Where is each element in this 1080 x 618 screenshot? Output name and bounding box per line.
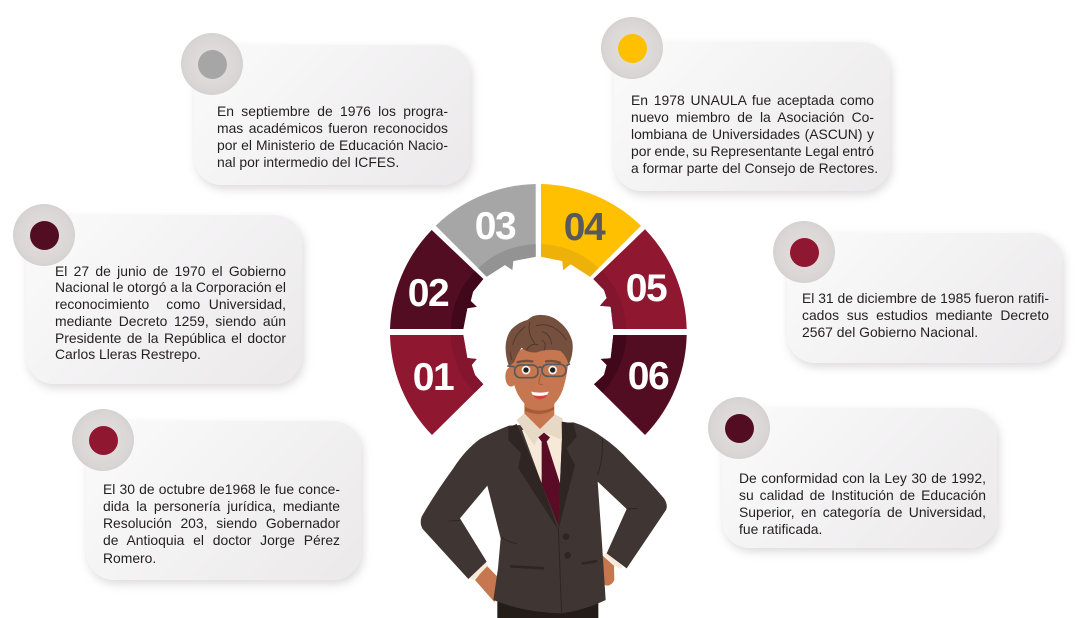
text: event 06 description: fue ratificada. bbox=[739, 521, 822, 537]
text: event 02 description bbox=[55, 262, 286, 362]
segment 01 bbox=[390, 335, 484, 435]
text: event 04 description: a formar parte del Consejo de Rectores. bbox=[631, 160, 878, 176]
number 02: 02 bbox=[408, 272, 449, 315]
shirt cuffs bbox=[469, 552, 623, 580]
text: event 06 description: De conformidad con la Ley 30 de 1992, bbox=[739, 470, 986, 486]
text: event 02 description: reconocimiento como Universidad, bbox=[55, 296, 286, 312]
text: event 03 description: mas académicos fueron reconocidos bbox=[217, 120, 448, 136]
text: event 03 description: nal por intermedio del ICFES. bbox=[217, 154, 399, 170]
text: event 04 description: por ende, su Representante Legal entró bbox=[631, 143, 874, 159]
text: event 01 description: de Antioquia el doctor Jorge Pérez bbox=[103, 532, 340, 548]
text: event 01 description bbox=[103, 480, 340, 566]
panel: event 05, 1985 bbox=[787, 233, 1062, 363]
segment 03 bbox=[436, 184, 536, 277]
text: event 05 description: cados sus estudios mediante Decreto bbox=[802, 307, 1049, 323]
nose bbox=[539, 373, 543, 385]
segment 05 bbox=[593, 229, 687, 329]
face bbox=[510, 338, 569, 409]
panel: event 06, 1992 bbox=[722, 408, 997, 548]
panel: event 01, 1968 bbox=[86, 421, 361, 580]
number 05: 05 bbox=[626, 267, 667, 310]
number 04: 04 bbox=[564, 206, 606, 249]
text: event 03 description: En septiembre de 1976 los progra- bbox=[217, 102, 448, 118]
number 01: 01 bbox=[413, 356, 454, 399]
text: event 03 description bbox=[217, 102, 448, 170]
segment 02 bbox=[390, 230, 484, 329]
text: event 04 description: En 1978 UNAULA fue aceptada como bbox=[631, 92, 874, 108]
eyebrows bbox=[517, 361, 561, 363]
text: event 02 description: mediante Decreto 1259, siendo aún bbox=[55, 313, 286, 329]
text: event 04 description: nuevo miembro de la Asociación Co- bbox=[631, 109, 874, 125]
badge: event 04 marker bbox=[601, 17, 663, 79]
text: event 01 description: Romero. bbox=[103, 550, 156, 566]
hair strands bbox=[510, 322, 567, 360]
text: event 06 description: su calidad de Institución de Educación bbox=[739, 487, 986, 503]
segment 06 bbox=[594, 335, 687, 435]
ear bbox=[505, 367, 517, 387]
illustration: man in suit bbox=[421, 315, 667, 618]
glasses bbox=[507, 364, 570, 378]
text: event 06 description bbox=[739, 470, 986, 537]
text: event 06 description: Superior, en categoría de Universidad, bbox=[739, 504, 986, 520]
text: event 02 description: Presidente de la República el doctor bbox=[55, 330, 286, 346]
text: event 05 description: El 31 de diciembre de 1985 fueron ratifi- bbox=[802, 290, 1049, 306]
badge: event 03 marker bbox=[181, 33, 243, 95]
badge: event 02 marker bbox=[13, 204, 75, 266]
neck shadow bbox=[525, 407, 554, 414]
necktie bbox=[538, 433, 560, 525]
jacket bbox=[421, 422, 667, 613]
text: event 01 description: dida la personería jurídica, mediante bbox=[103, 498, 340, 514]
text: event 04 description: lombiana de Universidades (ASCUN) y bbox=[631, 126, 874, 142]
text: event 02 description: Nacional le otorgó a la Corporación el bbox=[55, 279, 286, 295]
chart: segmented gear ring with man bbox=[390, 184, 687, 618]
text: event 02 description: El 27 de junio de 1970 el Gobierno bbox=[55, 262, 286, 278]
text: event 05 description: 2567 del Gobierno Nacional. bbox=[802, 324, 978, 340]
shirt bbox=[522, 425, 562, 483]
neck bbox=[524, 400, 554, 430]
lapels bbox=[508, 422, 577, 530]
collar bbox=[517, 413, 563, 446]
text: event 05 description bbox=[802, 290, 1049, 340]
text: event 04 description bbox=[631, 92, 878, 176]
text: event 02 description: Carlos Lleras Restrepo. bbox=[55, 346, 201, 362]
number 06: 06 bbox=[628, 355, 669, 398]
eyes bbox=[522, 366, 557, 374]
trousers bbox=[497, 602, 598, 618]
badge: event 01 marker bbox=[72, 409, 134, 471]
number 03: 03 bbox=[475, 205, 516, 248]
mouth bbox=[531, 392, 549, 399]
badge: event 05 marker bbox=[773, 221, 835, 283]
badge: event 06 marker bbox=[708, 397, 770, 459]
hands bbox=[475, 556, 614, 602]
panel: event 03, 1976 bbox=[194, 45, 470, 185]
hair bbox=[506, 315, 573, 367]
text: event 01 description: El 30 de octubre de1968 le fue conce- bbox=[103, 480, 340, 496]
text: event 03 description: por el Ministerio de Educación Nacio- bbox=[217, 137, 448, 153]
jacket details bbox=[448, 438, 637, 613]
segment 04 bbox=[541, 184, 641, 277]
panel: event 04, 1978 bbox=[614, 42, 890, 191]
panel: event 02, 1970 bbox=[26, 215, 302, 384]
text: event 01 description: Resolución 203, siendo Gobernador bbox=[103, 515, 340, 531]
